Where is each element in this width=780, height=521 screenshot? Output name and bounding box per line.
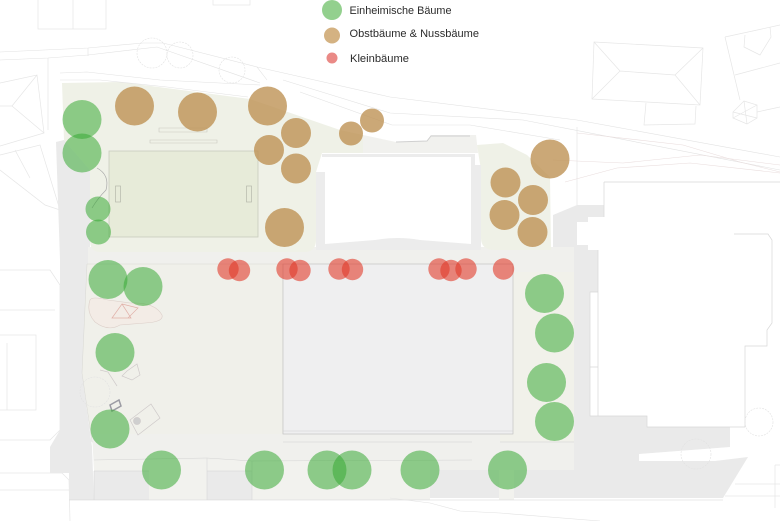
pink contour lines — [553, 133, 780, 182]
legend — [322, 0, 479, 65]
lawn west — [82, 264, 283, 442]
legend: small trees: Kleinbäume — [350, 53, 409, 65]
existing trees outline — [80, 38, 773, 469]
legend: fruit and nut trees: Obstbäume & Nussbäume — [350, 28, 479, 40]
legend: native trees — [322, 0, 452, 20]
south parking and planting — [94, 460, 514, 500]
school building fill — [588, 182, 780, 521]
lawn east — [500, 272, 574, 442]
curved path west — [92, 168, 107, 208]
legend: fruit and nut trees — [324, 28, 479, 44]
terrace strip north of central building — [363, 135, 478, 153]
south path band — [92, 434, 574, 470]
grey paved surfaces — [50, 140, 748, 500]
football pitch — [109, 151, 258, 237]
playground sandbox — [89, 298, 162, 328]
benches by pitch — [150, 128, 217, 143]
native trees — [62, 100, 574, 490]
court edge line — [283, 431, 574, 442]
playground equipment — [100, 364, 160, 435]
small white court beside school — [577, 222, 588, 245]
south edge lines — [69, 458, 723, 500]
legend: small trees — [326, 52, 409, 65]
central building white roof — [325, 157, 471, 244]
path band — [88, 247, 574, 273]
central building footprint — [316, 154, 481, 250]
sports court — [283, 264, 513, 434]
legend: native trees: Einheimische Bäume — [350, 5, 452, 17]
lawn north-east — [477, 143, 551, 250]
fruit and nut trees — [115, 86, 570, 247]
stairs and terrace north — [396, 136, 470, 142]
main lawn north — [62, 82, 363, 252]
small trees — [217, 258, 514, 281]
school building outline — [590, 182, 780, 427]
